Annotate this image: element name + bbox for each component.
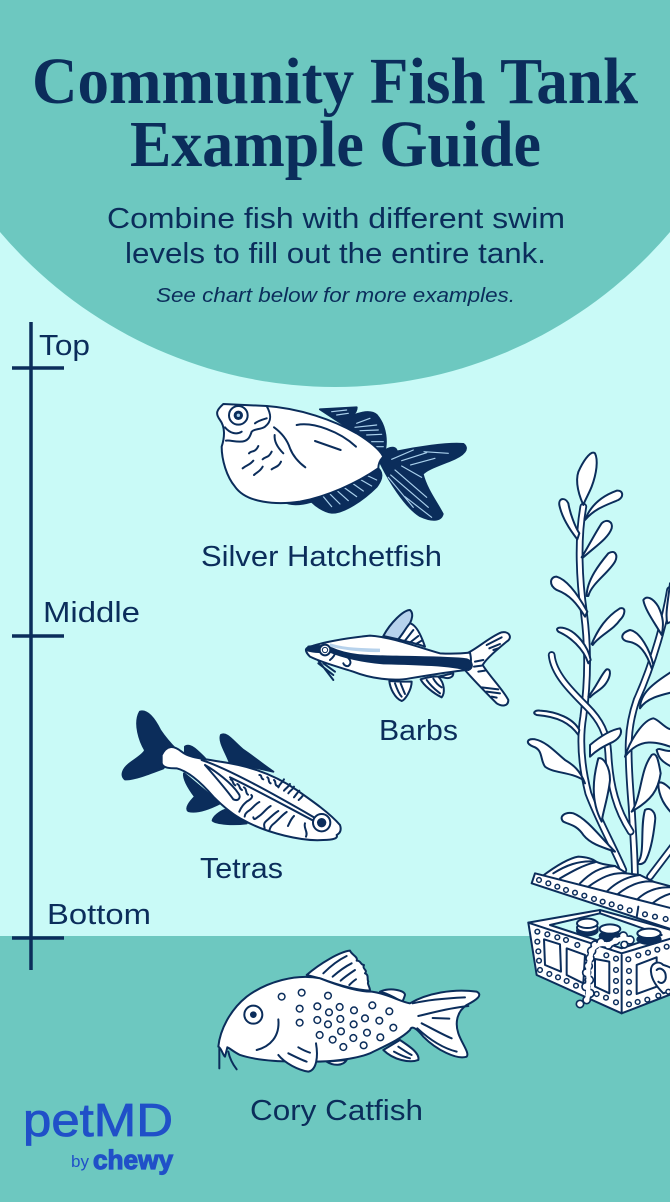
logo: petMD by chewy: petMD <box>23 1094 173 1146</box>
label: barbs: Barbs <box>379 715 458 747</box>
treasure chest <box>528 857 670 1013</box>
ring handle <box>651 963 670 993</box>
fish: barbs <box>306 610 510 706</box>
logo: petMD by chewy <box>23 1094 173 1175</box>
scale label: top: Top <box>39 330 90 362</box>
swim level scale <box>12 322 151 970</box>
plants and treasure chest <box>528 453 670 1013</box>
title: Community Fish Tank <box>32 45 638 118</box>
coins <box>577 919 661 944</box>
note: see chart below: See chart below for more examples. <box>156 285 515 307</box>
pearl necklace <box>576 932 634 1008</box>
scale label: middle: Middle <box>43 597 140 629</box>
seaweed right leaves <box>590 580 670 864</box>
subtitle <box>107 203 565 270</box>
label: cory catfish: Cory Catfish <box>250 1095 423 1127</box>
title: Example Guide <box>130 108 541 181</box>
label: silver hatchetfish: Silver Hatchetfish <box>201 541 442 573</box>
label: tetras: Tetras <box>200 853 283 885</box>
chest lid <box>532 857 670 929</box>
bottom teal band: tank floor <box>0 936 670 1202</box>
fish: cory catfish <box>218 951 479 1072</box>
logo: petMD by chewy: chewy <box>93 1145 173 1175</box>
subtitle: levels to fill out the entire tank. <box>125 238 546 270</box>
rivets <box>535 878 670 1007</box>
logo: petMD by chewy: by <box>71 1152 89 1171</box>
fish: tetras <box>123 711 341 840</box>
scale label: bottom: Bottom <box>47 899 151 931</box>
catfish spots <box>278 989 397 1050</box>
seaweed stems and left leaves <box>528 453 670 880</box>
fish: silver hatchetfish <box>217 404 466 520</box>
chest box <box>528 910 670 1013</box>
title <box>32 45 638 181</box>
subtitle: Combine fish with different swim <box>107 203 565 235</box>
header teal dome <box>0 0 670 387</box>
